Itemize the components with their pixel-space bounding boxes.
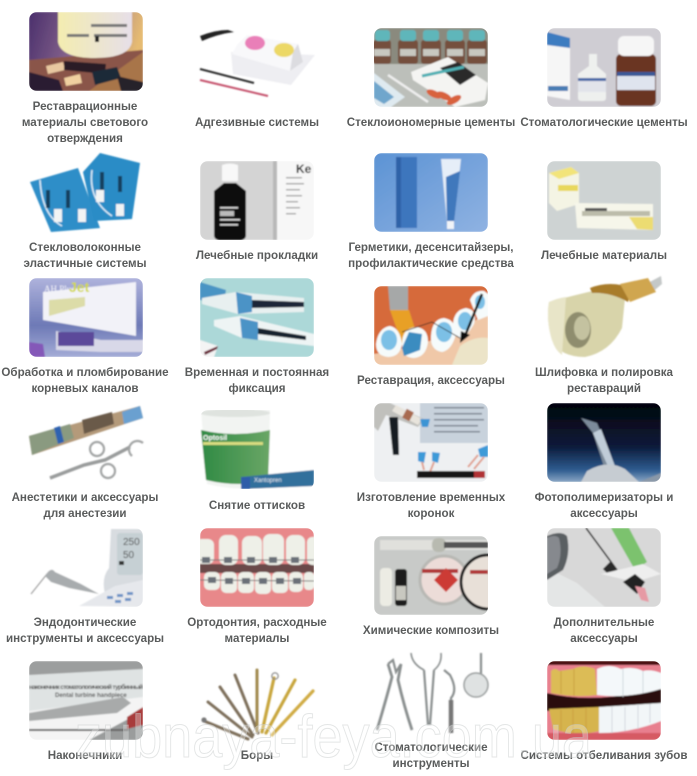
panel: Герметики, десенситайзеры [348, 153, 514, 270]
image: bonding tray and brushes [200, 30, 315, 96]
image: yellow packaging [547, 161, 661, 240]
image: dental handpiece leaflet [29, 661, 143, 740]
image: dental handpiece leaflet: Dental turbine handpiece [55, 693, 127, 699]
label: Герметики, десенситайзеры, [348, 241, 514, 254]
panel: Стоматологические цементы [520, 28, 688, 129]
label: для анестезии [43, 507, 127, 520]
label: Изготовление временных [357, 491, 506, 504]
image: Optosil bucket and tube: Xantopren [254, 478, 282, 484]
label: Временная и постоянная [185, 366, 329, 379]
label: реставраций [567, 382, 641, 395]
image: endodontic motor: 250 [123, 537, 140, 548]
image: endodontic motor: 50 [123, 550, 135, 561]
label: Ортодонтия, расходные [187, 616, 327, 629]
label: инструменты [392, 757, 470, 770]
label: Стекловолоконные [29, 241, 141, 254]
label: Дополнительные [554, 616, 655, 629]
label: Шлифовка и полировка [535, 366, 674, 379]
image: light-cure restorative compules [29, 12, 143, 91]
label: Наконечники [48, 749, 122, 762]
panel: Анестетики и аксессуары [12, 406, 159, 520]
label: Реставрационные [33, 100, 138, 113]
label: отверждения [47, 132, 123, 145]
label: Системы отбеливания зубов [520, 749, 688, 762]
panel: Лечебные прокладки [196, 161, 318, 262]
panel: Дополнительные аксессуары [547, 528, 661, 645]
image: AH Plus Jet box [29, 278, 143, 357]
image: cement bottles [547, 28, 661, 107]
panel: Фотополимеризаторы и аксессуары [535, 403, 673, 520]
panel: Боры [201, 670, 313, 762]
label: Стоматологические цементы [520, 116, 688, 129]
image: black lining bottle: Ke [296, 162, 312, 176]
label: фиксация [229, 382, 285, 395]
image: two cement tubes [200, 278, 314, 357]
label: Стеклоиономерные цементы [347, 116, 515, 129]
label: Эндодонтические [34, 616, 137, 629]
image: Optosil bucket and tube [200, 409, 314, 489]
image: AH Plus Jet box: Jet [69, 279, 90, 295]
label: Анестетики и аксессуары [12, 491, 159, 504]
panel: Ортодонтия, расходные материалы [187, 528, 327, 645]
image: chemical composite kit [374, 536, 488, 615]
image: Optosil bucket and tube: Optosil [203, 435, 227, 442]
panel: Системы отбеливания зубов [520, 661, 688, 762]
image: grey machine with green strip [547, 528, 661, 607]
image: glass ionomer jars and mixing block [373, 28, 488, 107]
image: braces on teeth [196, 528, 319, 607]
panel: Химические композиты [363, 536, 498, 634]
panel: Наконечники [29, 661, 143, 762]
panel: Реставрация, аксессуары [357, 286, 505, 387]
panel: Лечебные материалы [541, 161, 667, 262]
image: dental burs fan [201, 670, 313, 739]
panel: Стекловолоконные эластичные системы [24, 153, 147, 270]
label: профилактические средства [348, 257, 514, 270]
label: Обработка и пломбирование [1, 366, 169, 379]
image: polishing brush [548, 276, 662, 357]
panel: Эндодонтические инструменты [6, 528, 164, 645]
panel: Снятие оттисков [200, 409, 314, 512]
image: whitening smile before and after [547, 661, 661, 740]
panel: Стоматологические инструменты [374, 653, 488, 770]
label: Стоматологические [374, 741, 488, 754]
image: curing light [547, 403, 661, 482]
image: blue fibre post cards [30, 153, 140, 232]
watermark: zubnaya-feya.com.ua [75, 703, 593, 770]
label: Адгезивные системы [195, 116, 319, 129]
panel: Обработка корневых каналов [1, 278, 169, 395]
image: anesthetic cartridge and syringe [29, 406, 143, 478]
image: teeth restoration diagram [374, 286, 488, 365]
image: AH Plus Jet box: AH Plus [44, 284, 75, 294]
label: аксессуары [570, 632, 638, 645]
label: Лечебные материалы [541, 249, 667, 262]
panel: Реставрационные материалы [22, 12, 148, 145]
label: инструменты и аксессуары [6, 632, 164, 645]
label: материалы светового [22, 116, 148, 129]
label: аксессуары [570, 507, 638, 520]
label: Лечебные прокладки [196, 249, 318, 262]
panel: Шлифовка и полировка реставраций [535, 276, 674, 395]
label: эластичные системы [24, 257, 147, 270]
panel: Временная и постоянная фиксация [185, 278, 329, 395]
panel: Адгезивные системы [195, 30, 319, 129]
panel: Изготовление временных коронок [357, 403, 506, 520]
label: корневых каналов [31, 382, 139, 395]
label: Химические композиты [363, 624, 499, 637]
label: Фотополимеризаторы и [535, 491, 673, 504]
label: материалы [225, 632, 290, 645]
label: Боры [241, 749, 273, 762]
label: Реставрация, аксессуары [357, 374, 505, 387]
label: коронок [408, 507, 455, 520]
image: pliers, scissors, probe and mirror [377, 653, 488, 733]
image: cartridge gun and tips [374, 403, 488, 482]
label: Снятие оттисков [209, 499, 305, 512]
panel: Стеклоиономерные цементы [347, 28, 515, 129]
image: endodontic motor [29, 528, 143, 607]
image: blue box and tube [374, 153, 488, 232]
image: dental handpiece leaflet: наконечник стоматологический турбинный [29, 683, 143, 691]
